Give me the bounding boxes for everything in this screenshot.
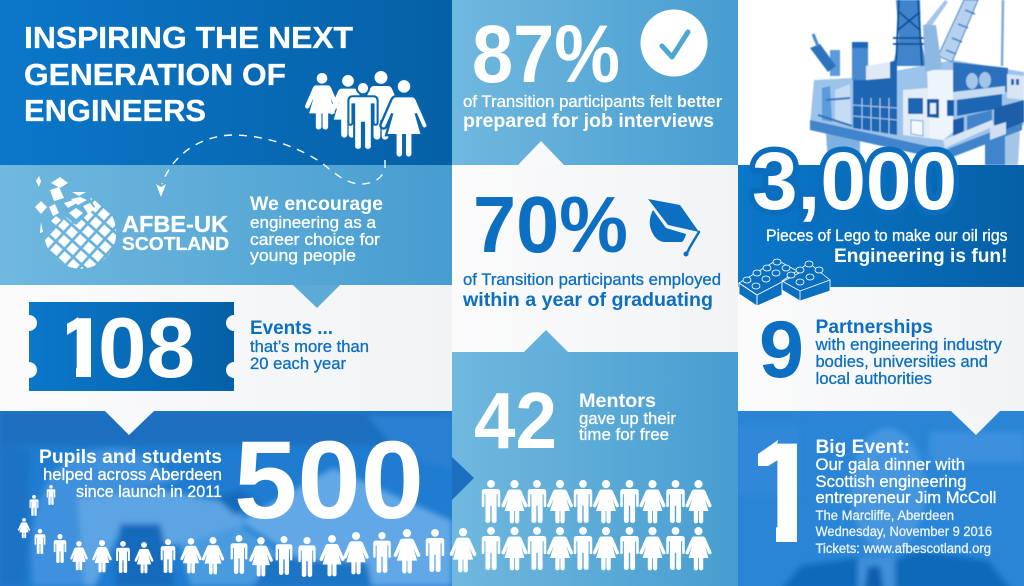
text: Lego: Pieces of Lego to make our oil rigs bbox=[766, 226, 1008, 245]
text: big event: Scottish engineering bbox=[816, 472, 966, 491]
arrow: white pointer bbox=[105, 411, 154, 435]
ticket: 108: 08 bbox=[98, 301, 195, 396]
text: mission bbox=[250, 193, 383, 265]
number: 1: 1 bbox=[744, 414, 824, 573]
heading: GENERATION OF bbox=[24, 57, 286, 92]
number: 9: 9 bbox=[759, 305, 804, 395]
text: big event: entrepreneur Jim McColl bbox=[816, 488, 996, 507]
text: Lego bbox=[766, 226, 1008, 267]
heading: INSPIRING THE NEXT bbox=[24, 20, 353, 55]
arrow: up pointer bbox=[524, 330, 568, 352]
pictogram: pupils trail bbox=[18, 485, 476, 577]
pictogram: mentors bbox=[482, 480, 712, 570]
text: pupils: helped across Aberdeen bbox=[43, 465, 222, 484]
deck bbox=[810, 60, 1024, 158]
text: big event bbox=[816, 436, 996, 556]
text: mentors bbox=[579, 390, 676, 444]
text: partnerships: local authorities bbox=[816, 369, 932, 388]
text: pupils: since launch in 2011 bbox=[76, 482, 222, 501]
text: partnerships bbox=[815, 316, 1002, 388]
right modules bbox=[953, 62, 1008, 94]
panel: 42 mentors bbox=[452, 330, 738, 586]
arrow: dashed path from people to logo bbox=[156, 135, 385, 197]
text: big event: Big Event: bbox=[816, 436, 910, 458]
arrow: white pointer bbox=[951, 411, 1000, 435]
panel: title bbox=[0, 0, 452, 165]
derrick bbox=[893, 0, 926, 66]
legs bbox=[826, 133, 861, 154]
text: events: 20 each year bbox=[250, 354, 346, 373]
text: mission: young people bbox=[250, 246, 356, 265]
text: mentors: time for free bbox=[579, 425, 669, 444]
crane bbox=[938, 0, 978, 62]
ticket: 108 bbox=[29, 301, 234, 396]
text: interviews: prepared for job interviews bbox=[463, 110, 714, 132]
text: partnerships: with engineering industry bbox=[815, 335, 1002, 354]
panel: gala photo bbox=[738, 411, 1024, 586]
panel: pupils and students bbox=[39, 411, 424, 542]
panel: Lego oil rig image bbox=[738, 0, 1024, 165]
text: mentors: gave up their bbox=[579, 409, 676, 428]
logo: globe bbox=[35, 176, 116, 269]
text: employed bbox=[462, 270, 721, 311]
text: pupils: Pupils and students bbox=[39, 446, 222, 468]
text: big event: Our gala dinner with bbox=[816, 455, 965, 474]
logo wordmark: SCOTLAND bbox=[122, 234, 229, 254]
panel: pupils photo background bbox=[0, 411, 452, 586]
arrow: right pointer from photo bbox=[452, 457, 474, 500]
logo wordmark: AFBE-UK bbox=[122, 211, 228, 237]
text: employed: within a year of graduating bbox=[462, 289, 713, 311]
text: partnerships: bodies, universities and bbox=[816, 352, 988, 371]
text: interviews: better bbox=[677, 92, 722, 111]
icon: Lego bricks bbox=[739, 259, 830, 306]
number: 1 bbox=[758, 440, 797, 542]
dark module bbox=[853, 76, 897, 135]
icon: check circle bbox=[640, 10, 708, 76]
panel: AFBE-UK Scotland bbox=[0, 165, 452, 285]
arrow: down pointer bbox=[293, 285, 340, 308]
text: employed: of Transition participants employed bbox=[463, 270, 721, 289]
text: interviews bbox=[463, 92, 722, 132]
heading: ENGINEERS bbox=[24, 93, 206, 128]
white blocks bbox=[902, 88, 938, 140]
text: big event: Tickets: www.afbescotland.org bbox=[816, 541, 991, 556]
tanks bbox=[852, 42, 868, 80]
mast bbox=[1002, 0, 1003, 66]
logo wordmark bbox=[122, 211, 229, 254]
number: 500: 500 bbox=[234, 419, 424, 542]
text: mission: engineering as a bbox=[250, 213, 377, 232]
panel: partnerships bbox=[738, 287, 1024, 411]
text: interviews: of Transition participants felt bbox=[463, 92, 672, 111]
text: mission: career choice for bbox=[250, 230, 380, 249]
arrow: up pointer bbox=[518, 141, 564, 165]
panel: big event bbox=[758, 411, 1000, 556]
text: Lego: Engineering is fun! bbox=[834, 245, 1008, 267]
number: 3,000: 3,000 bbox=[752, 136, 957, 227]
number: 87%: 87% bbox=[472, 9, 620, 100]
icon: group of people bbox=[305, 71, 428, 158]
text: big event: The Marcliffe, Aberdeen bbox=[816, 508, 954, 523]
text: events bbox=[250, 317, 369, 373]
heading bbox=[24, 20, 353, 128]
arrow: right pointer bbox=[738, 10, 762, 58]
panel: 70 percent bbox=[452, 141, 738, 352]
icon: graduation cap bbox=[648, 199, 699, 256]
text: events: Events ... bbox=[250, 317, 333, 339]
text: partnerships: Partnerships bbox=[816, 316, 933, 338]
panel: 3,000 Lego pieces bbox=[738, 136, 1024, 287]
number: 70%: 70% bbox=[473, 180, 628, 269]
ticket: 108: 1 bbox=[52, 301, 111, 396]
text: mentors: Mentors bbox=[579, 390, 656, 412]
panel: events bbox=[0, 285, 452, 411]
text: big event: Wednesday, November 9 2016 bbox=[816, 524, 992, 539]
text: events: that’s more than bbox=[250, 337, 369, 356]
text: pupils bbox=[39, 446, 222, 501]
text: mission: We encourage bbox=[250, 193, 383, 215]
flare boom bbox=[810, 44, 836, 72]
panel: 87 percent bbox=[452, 0, 762, 165]
number: 42: 42 bbox=[474, 376, 557, 465]
